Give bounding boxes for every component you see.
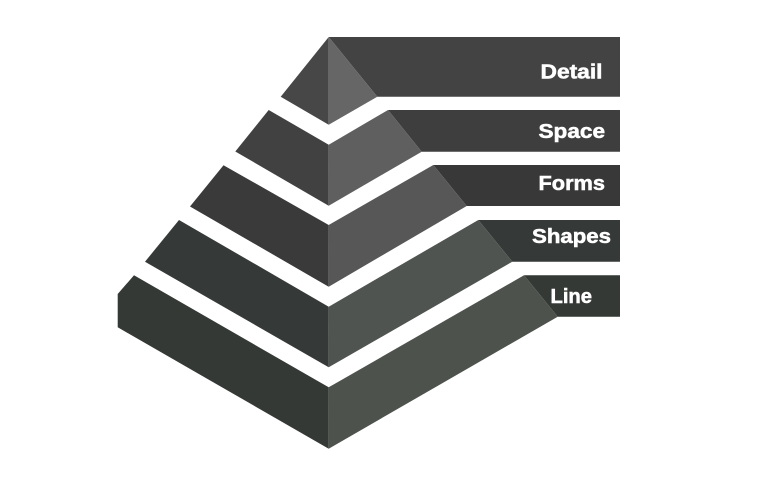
tier: Forms: Forms (538, 172, 605, 195)
tier: Shapes: Shapes (532, 225, 611, 248)
tier: Line: Line (550, 285, 592, 308)
tier: Detail: Detail (540, 60, 602, 84)
tier: Space (235, 110, 620, 206)
tier: Forms (190, 165, 620, 287)
tier: Space: Space (538, 120, 605, 143)
tier: Detail (281, 37, 620, 125)
tier: Shapes (145, 220, 620, 367)
tier: Line (118, 275, 620, 449)
